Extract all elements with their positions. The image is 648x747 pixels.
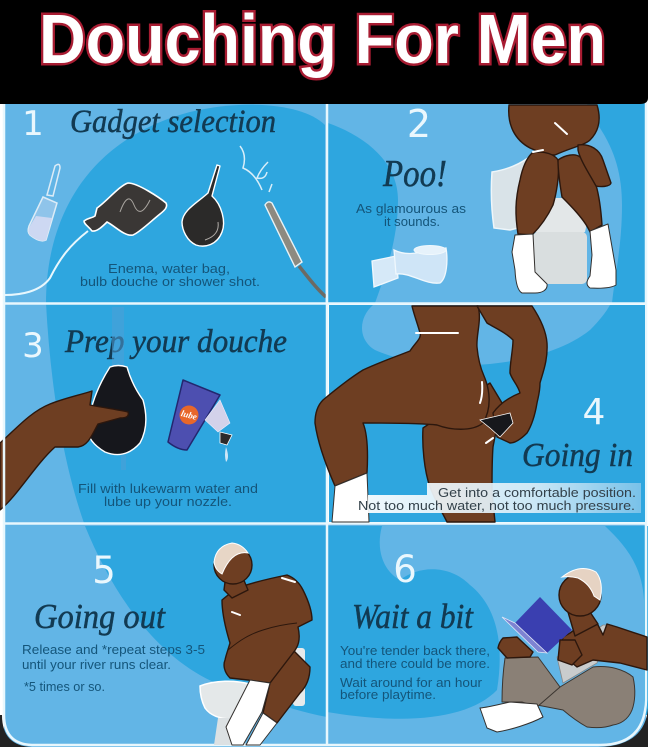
icon: water bag with hose — [5, 183, 167, 295]
heading: gadget selection: Gadget selection — [70, 104, 276, 140]
caption: comfortable position: Not too much water, not too much pressure. — [358, 498, 635, 513]
caption: tender back there: Wait around for an hour — [340, 675, 483, 690]
caption: tender back there — [340, 643, 490, 702]
panel: step 6 background — [327, 523, 648, 747]
heading: wait a bit: Wait a bit — [352, 597, 474, 636]
heading: going in: Going in — [522, 437, 633, 474]
panel content: step 6 wait a bit — [340, 548, 647, 732]
caption: gadgets: Enema, water bag, — [108, 261, 230, 276]
icon: bulb douche — [182, 165, 224, 246]
icon: water stream — [112, 307, 126, 470]
text band — [368, 483, 641, 513]
icon: shower shot with water spray — [240, 146, 326, 297]
panel: step 1 gadget selection — [4, 100, 327, 303]
panel: step 3 prep your douche — [0, 303, 327, 523]
caption: tender back there: You're tender back there, — [340, 643, 490, 658]
title banner — [0, 0, 648, 104]
icon: lube tube — [168, 380, 232, 462]
caption: as glamourous: As glamourous as — [356, 201, 467, 216]
illustration: standing figure with raised leg — [315, 306, 547, 522]
toilet — [200, 648, 305, 745]
illustration: seated figure on toilet — [491, 105, 616, 293]
illustration: hand and forearm — [0, 391, 128, 510]
step number 2: 2 — [407, 102, 431, 146]
caption: gadgets: bulb douche or shower shot. — [80, 274, 260, 289]
heading: poo: Poo! — [382, 153, 447, 195]
caption: fill with water: lube up your nozzle. — [104, 494, 232, 509]
caption: as glamourous — [356, 201, 467, 229]
heading: going out: Going out — [34, 597, 166, 636]
step number 3: 3 — [22, 326, 44, 366]
caption: release and repeat — [22, 642, 205, 694]
icon: enema bottle — [28, 164, 60, 241]
caption: tender back there: and there could be more. — [340, 656, 490, 671]
icon: bulb held under water — [88, 366, 146, 455]
step number 1: 1 — [22, 104, 44, 144]
illustration: figure reading a book — [480, 568, 647, 732]
title: Douching For Men — [39, 0, 606, 78]
caption: as glamourous: it sounds. — [384, 214, 440, 229]
toilet — [491, 158, 587, 284]
caption: fill with water: Fill with lukewarm water and — [78, 481, 258, 496]
panel: step 5 going out — [4, 523, 327, 747]
caption: release and repeat: Release and *repeat steps 3-5 — [22, 642, 205, 657]
step number 6: 6 — [393, 548, 417, 591]
caption: comfortable position — [358, 485, 636, 513]
step number 5: 5 — [92, 549, 116, 592]
icon: toilet paper roll — [372, 246, 447, 287]
caption: release and repeat: until your river runs clear. — [22, 657, 171, 672]
caption: release and repeat: *5 times or so. — [24, 679, 105, 694]
heading: prep your douche: Prep your douche — [64, 324, 287, 360]
caption: gadgets — [80, 261, 260, 289]
icon: lube tube: lube — [180, 408, 198, 422]
caption: fill with water — [78, 481, 258, 509]
caption: comfortable position: Get into a comfortable position. — [438, 485, 636, 500]
panel content: step 5 going out — [22, 543, 312, 745]
panel: step 4 going in — [315, 305, 645, 522]
illustration: figure seated on toilet — [200, 543, 312, 745]
step number 4: 4 — [583, 392, 605, 433]
bottom corners — [0, 708, 648, 747]
panel: step 2 poo — [327, 100, 646, 303]
caption: tender back there: before playtime. — [340, 687, 436, 702]
